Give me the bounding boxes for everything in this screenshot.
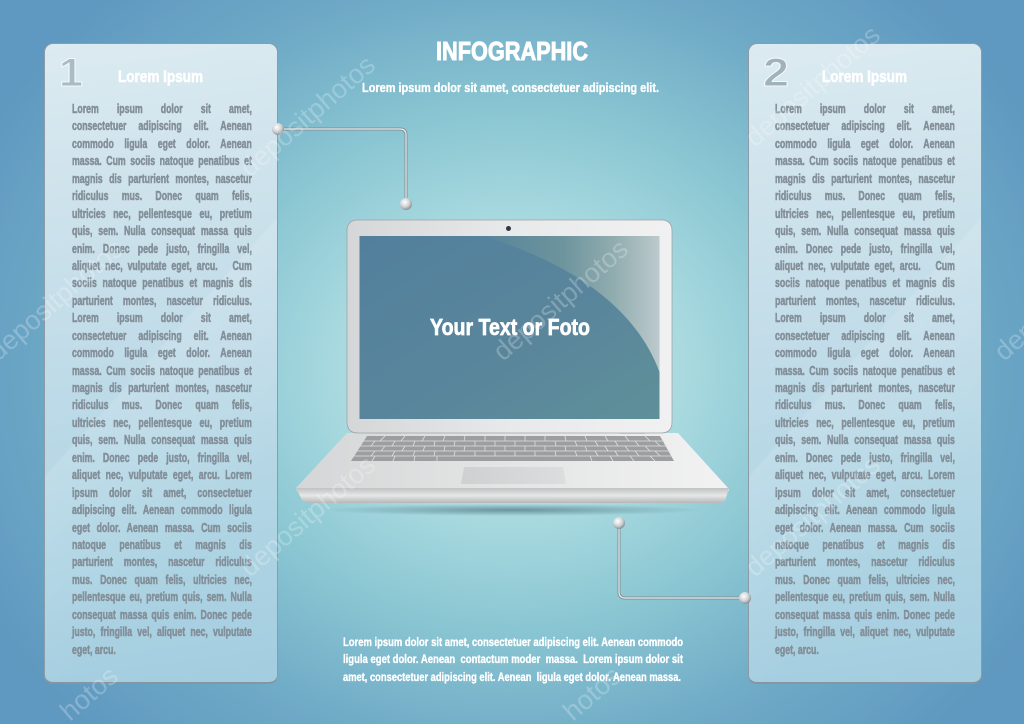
panel 2 body text: parturient montes, nascetur ridiculus — [775, 555, 955, 569]
laptop base — [296, 433, 729, 492]
panel 1 body text: quis, sem. Nulla consequat massa quis — [72, 224, 252, 238]
panel 1 body text: parturient montes, nascetur ridiculus. — [72, 294, 252, 308]
panel 1 heading: Lorem Ipsum — [118, 67, 203, 86]
screen text: Your Text or Foto — [430, 314, 590, 340]
bottom text block: Lorem ipsum dolor sit amet, consectetuer adipiscing elit. Aenean commodo — [343, 635, 683, 649]
panel 1 body text: magnis dis parturient montes, nascetur — [72, 381, 252, 395]
panel 1 body text: massa. Cum sociis natoque penatibus et — [72, 154, 252, 168]
panel 1 body text: eget dolor. Aenean massa. Cum sociis — [72, 520, 252, 534]
panel 2 body text: mus. Donec quam felis, ultricies nec, — [775, 573, 955, 587]
panel 2 body text: consequat massa quis enim. Donec pede — [775, 608, 955, 622]
panel 2 body text: Lorem ipsum dolor sit amet, — [775, 311, 955, 325]
panel 1 body text: ultricies nec, pellentesque eu, pretium — [72, 207, 252, 221]
panel 1 body text: enim. Donec pede justo, fringilla vel, — [72, 242, 252, 256]
panel 2 body text: magnis dis parturient montes, nascetur — [775, 381, 955, 395]
panel 1 body text: consequat massa quis enim. Donec pede — [72, 608, 252, 622]
panel 1 body text: Lorem ipsum dolor sit amet, — [72, 311, 252, 325]
panel 2 body text: quis, sem. Nulla consequat massa quis — [775, 433, 955, 447]
panel 2 body text: consectetuer adipiscing elit. Aenean — [775, 119, 955, 133]
panel 1 body text: commodo ligula eget dolor. Aenean — [72, 346, 252, 360]
laptop shadow — [323, 504, 703, 516]
laptop front lip — [296, 488, 729, 503]
watermarks: depositphotos — [487, 234, 634, 367]
panel 2 body text: enim. Donec pede justo, fringilla vel, — [775, 451, 955, 465]
trackpad — [461, 467, 566, 484]
panel 2 body text: quis, sem. Nulla consequat massa quis — [775, 224, 955, 238]
panel 2 body text: massa. Cum sociis natoque penatibus et — [775, 154, 955, 168]
panel 1 body text: sociis natoque penatibus et magnis dis — [72, 276, 252, 290]
subtitle: Lorem ipsum dolor sit amet, consectetuer adipiscing elit. — [362, 80, 659, 95]
panel 2 body text: commodo ligula eget dolor. Aenean — [775, 346, 955, 360]
panel 1 body text: consectetuer adipiscing elit. Aenean — [72, 119, 252, 133]
panel 2 body text: enim. Donec pede justo, fringilla vel, — [775, 242, 955, 256]
panel 1 body text: ridiculus mus. Donec quam felis, — [72, 398, 252, 412]
panel 2 body text: aliquet nec, vulputate eget, arcu. Lorem — [775, 468, 955, 482]
panel 1 body text: ultricies nec, pellentesque eu, pretium — [72, 416, 252, 430]
watermarks: depositphotos — [234, 450, 381, 583]
panel 2 body text: consectetuer adipiscing elit. Aenean — [775, 329, 955, 343]
keyboard — [351, 436, 674, 461]
panel 2 body text: ultricies nec, pellentesque eu, pretium — [775, 416, 955, 430]
panel 2 body text: ridiculus mus. Donec quam felis, — [775, 398, 955, 412]
panel 1 body text: commodo ligula eget dolor. Aenean — [72, 137, 252, 151]
screen reflection — [483, 236, 660, 372]
panel 2 body text: ridiculus mus. Donec quam felis, — [775, 189, 955, 203]
panel 1 body text: mus. Donec quam felis, ultricies nec, — [72, 573, 252, 587]
number 1: 1 — [59, 51, 83, 95]
panel 2 body text: ipsum dolor sit amet, consectetuer — [775, 486, 955, 500]
panel 1 body text: quis, sem. Nulla consequat massa quis — [72, 433, 252, 447]
title: INFOGRAPHIC — [436, 36, 588, 66]
panel 2 body text: ultricies nec, pellentesque eu, pretium — [775, 207, 955, 221]
panel 1 body text: massa. Cum sociis natoque penatibus et — [72, 364, 252, 378]
webcam — [506, 226, 511, 231]
panel 2 body text — [774, 102, 956, 657]
number 2: 2 — [763, 51, 789, 95]
panel 2 body text: massa. Cum sociis natoque penatibus et — [775, 364, 955, 378]
connector: laptop to right card — [613, 517, 751, 604]
panel: left glass card — [44, 43, 278, 684]
panel 2 body text: aliquet nec, vulputate eget, arcu. Cum — [775, 259, 955, 273]
panel 1 body text: eget, arcu. — [72, 643, 116, 657]
panel 1 body text: aliquet nec, vulputate eget, arcu. Cum — [72, 259, 252, 273]
panel 1 body text: ridiculus mus. Donec quam felis, — [72, 189, 252, 203]
panel 1 body text: pellentesque eu, pretium quis, sem. Nulla — [72, 590, 252, 604]
panel: right glass card — [748, 43, 982, 684]
panel 2 body text: pellentesque eu, pretium quis, sem. Nulla — [775, 590, 955, 604]
panel 2 body text: natoque penatibus et magnis dis — [775, 538, 955, 552]
panel 2 body text: parturient montes, nascetur ridiculus. — [775, 294, 955, 308]
panel 1 body text: natoque penatibus et magnis dis — [72, 538, 252, 552]
panel 2 body text: justo, fringilla vel, aliquet nec, vulputate — [775, 625, 955, 639]
panel 2 body text: sociis natoque penatibus et magnis dis — [775, 276, 955, 290]
laptop — [296, 220, 729, 516]
panel 2 body text: eget, arcu. — [775, 643, 819, 657]
bottom text block: ligula eget dolor. Aenean contactum moder massa. Lorem ipsum dolor sit — [343, 652, 683, 666]
watermarks: depositphotos — [739, 20, 886, 153]
panel 1 body text: justo, fringilla vel, aliquet nec, vulputate — [72, 625, 252, 639]
panel 1 body text: consectetuer adipiscing elit. Aenean — [72, 329, 252, 343]
connector: left card to laptop — [272, 123, 412, 210]
panel 1 body text: enim. Donec pede justo, fringilla vel, — [72, 451, 252, 465]
panel 2 body text: adipiscing elit. Aenean commodo ligula — [775, 503, 955, 517]
panel 1 body text: parturient montes, nascetur ridiculus — [72, 555, 252, 569]
panel 1 body text — [72, 102, 252, 657]
laptop screen — [360, 236, 660, 419]
watermarks: depositphotos — [234, 50, 381, 183]
panel 2 body text: Lorem ipsum dolor sit amet, — [775, 102, 955, 116]
bottom text block: amet, consectetuer adipiscing elit. Aenean ligula eget dolor. Aenean massa. — [343, 670, 681, 684]
panel 2 body text: eget dolor. Aenean massa. Cum sociis — [775, 520, 955, 534]
watermarks: depositphotos — [739, 450, 886, 583]
panel 1 body text: ipsum dolor sit amet, consectetuer — [72, 486, 252, 500]
hinges — [376, 430, 645, 434]
bottom text block — [343, 635, 683, 684]
panel 1 body text: aliquet nec, vulputate eget, arcu. Lorem — [72, 468, 252, 482]
panel 1 body text: magnis dis parturient montes, nascetur — [72, 172, 252, 186]
panel 1 body text: adipiscing elit. Aenean commodo ligula — [72, 503, 252, 517]
laptop lid — [347, 220, 672, 433]
panel 2 heading: Lorem Ipsum — [822, 67, 907, 86]
panel 2 body text: commodo ligula eget dolor. Aenean — [775, 137, 955, 151]
panel 1 body text: Lorem ipsum dolor sit amet, — [72, 102, 252, 116]
panel 2 body text: magnis dis parturient montes, nascetur — [775, 172, 955, 186]
